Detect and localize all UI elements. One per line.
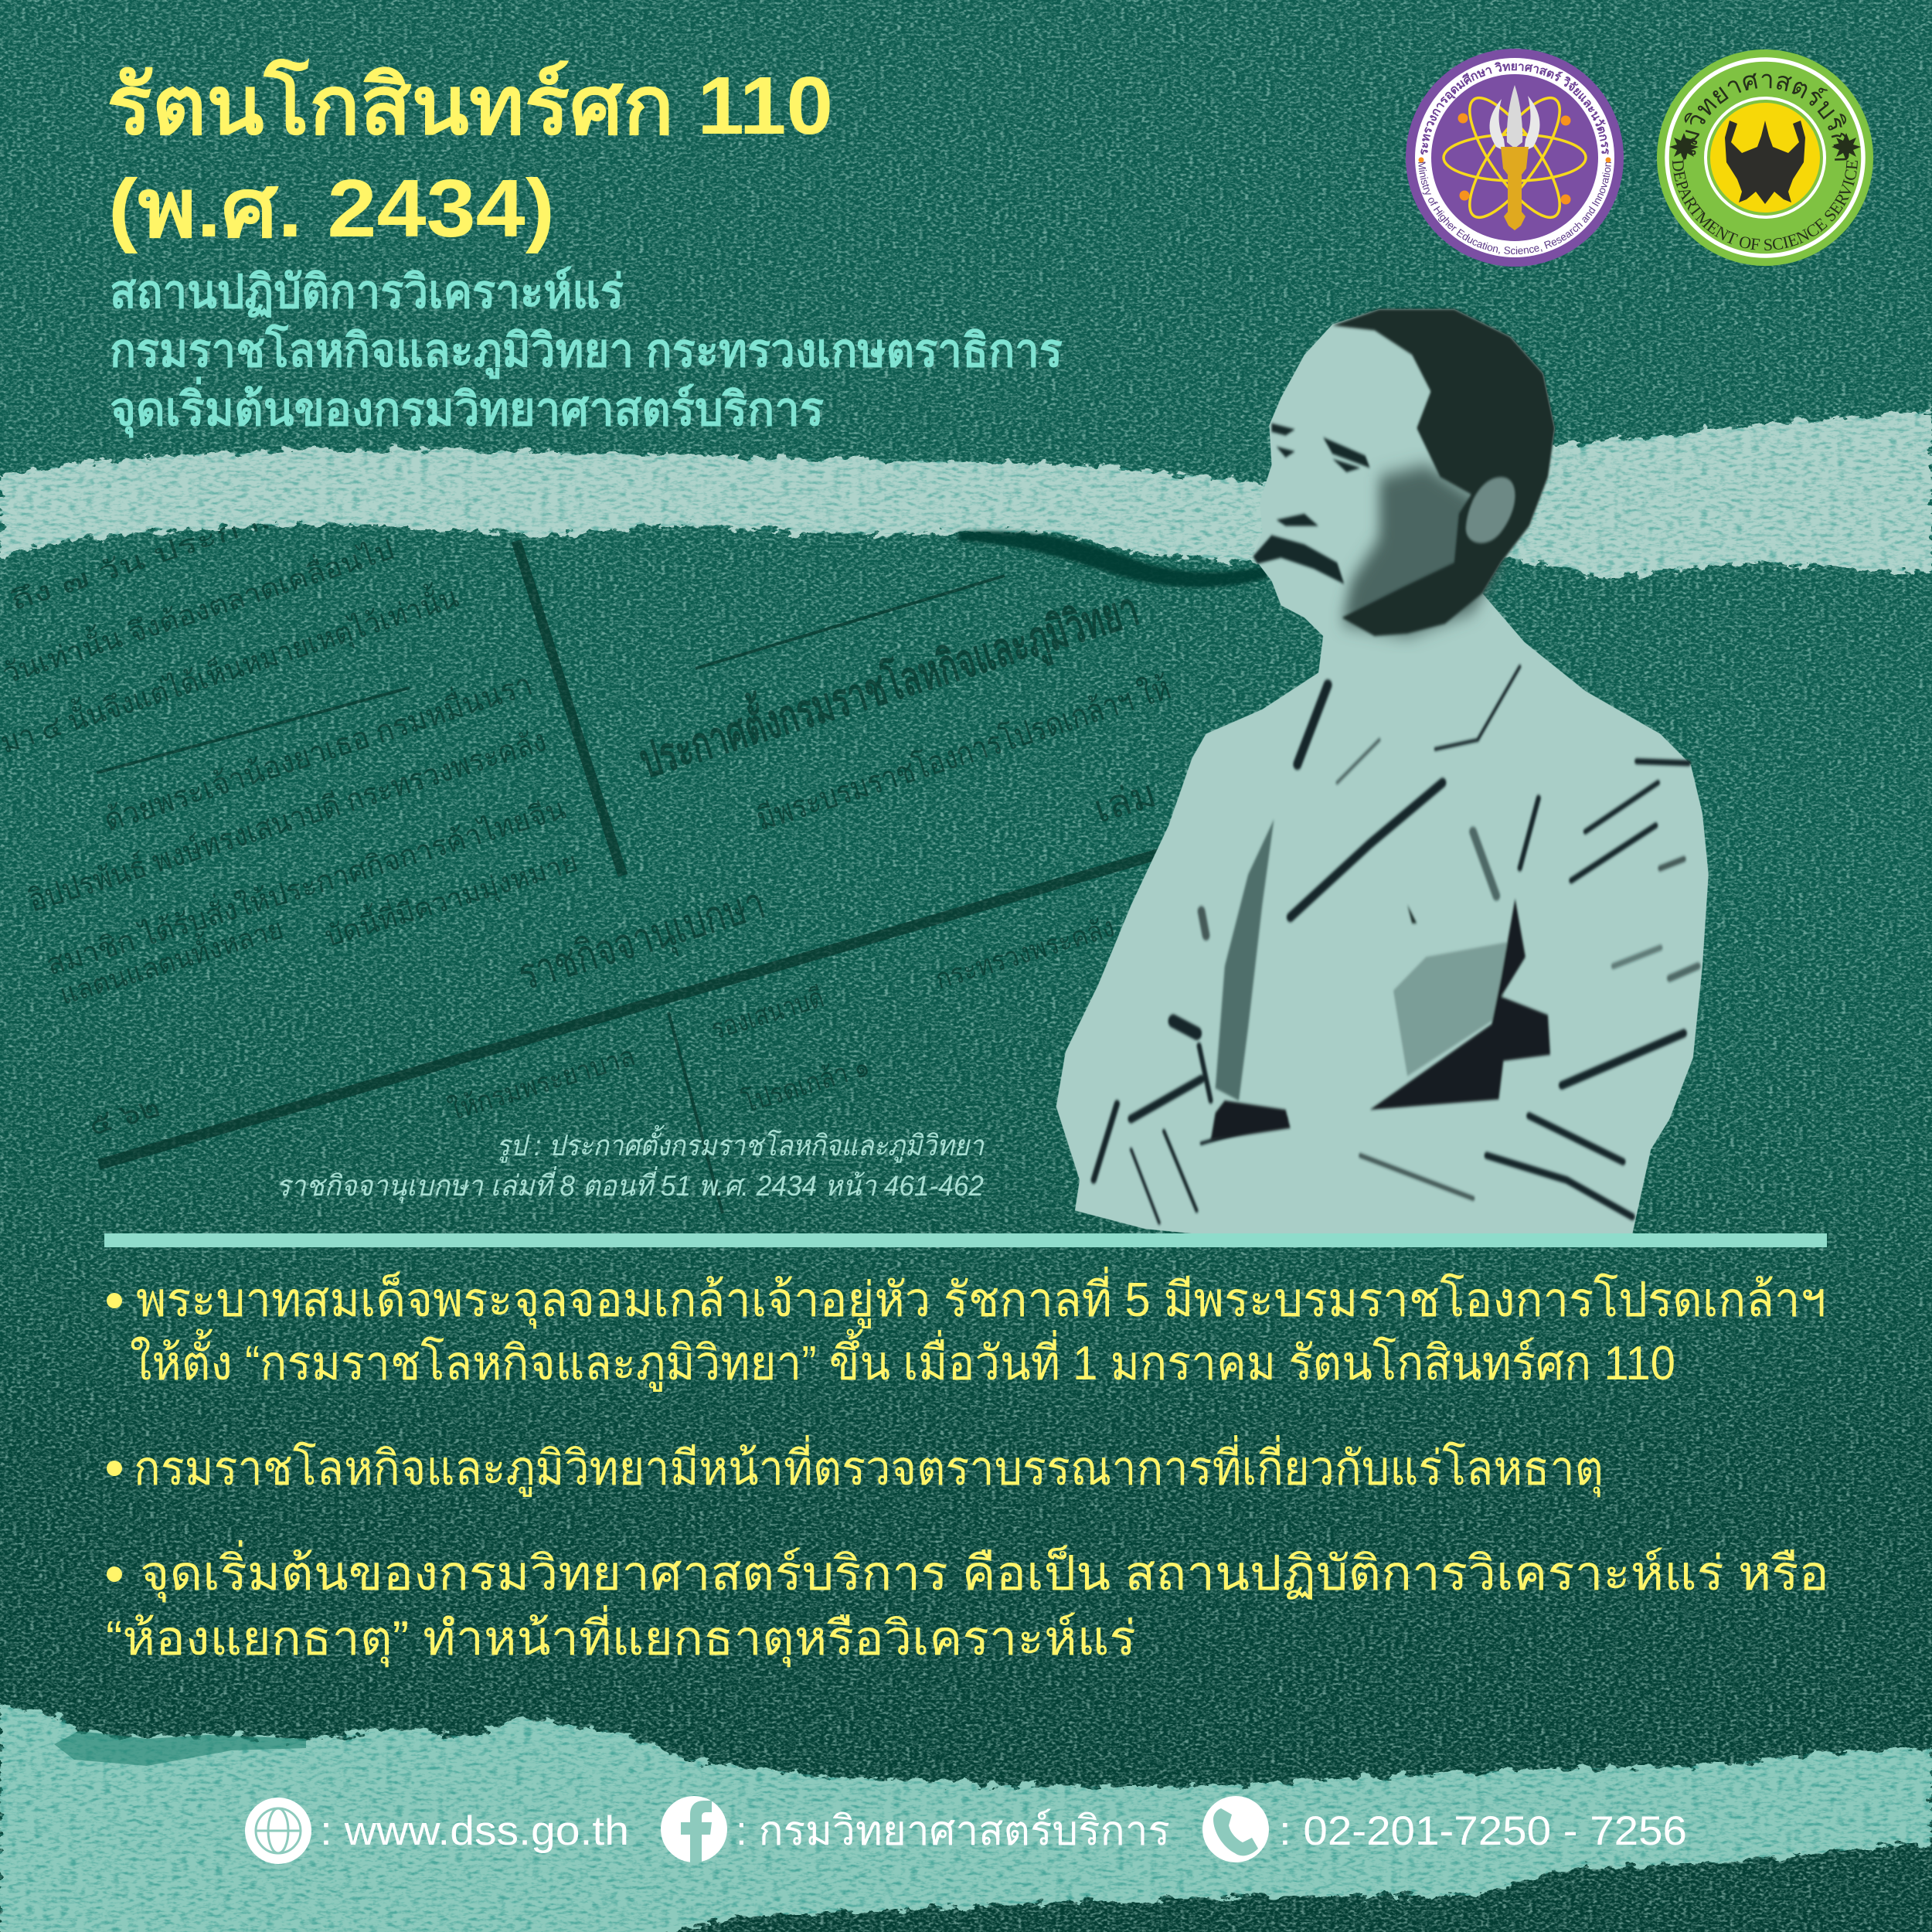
jacket shading and pocket <box>1211 819 1550 1141</box>
trident and gold staff <box>1490 85 1539 230</box>
torn paper strip: top <box>0 411 1932 597</box>
department name ring text <box>1668 65 1862 254</box>
scanned proclamation document printed faintly on background: วันเท่านั้น จึงต้องตลาดเคลื่อนไป <box>0 529 398 690</box>
scanned proclamation document printed faintly on background: บัดนี้ที่มีความมุ่งหมาย <box>320 841 582 954</box>
footer contact: phone <box>1202 1796 1687 1862</box>
department name ring text: กรมวิทยาศาสตร์บริการ <box>1682 73 1849 161</box>
body bullet 3: “ห้องแยกธาตุ” ทำหน้าที่แยกธาตุหรือวิเคราะห์แร่ <box>106 1605 1136 1667</box>
subtitle: จุดเริ่มต้นของกรมวิทยาศาสตร์บริการ <box>110 376 824 438</box>
scanned proclamation document printed faintly on background: อิปปรพันธ์ พงษ์ทรงเสนาบดี กระทรวงพระคลัง <box>24 723 550 919</box>
subtitle: สถานปฏิบัติการวิเคราะห์แร่ <box>110 266 624 318</box>
atom orbits <box>1444 86 1586 230</box>
logo: Department of Science Service <box>1657 49 1873 266</box>
title: รัตนโกสินทร์ศก 110 <box>107 58 833 151</box>
footer contact: facebook: : กรมวิทยาศาสตร์บริการ <box>736 1808 1170 1854</box>
image caption: รูป : ประกาศตั้งกรมราชโลหกิจและภูมิวิทยา <box>496 1124 985 1163</box>
body bullet 1: ให้ตั้ง “กรมราชโลหกิจและภูมิวิทยา” ขึ้น เมื่อวันที่ 1 มกราคม รัตนโกสินทร์ศก 110 <box>130 1328 1675 1392</box>
moustache, eyes and brows <box>1253 423 1370 584</box>
scanned proclamation document printed faintly on background: เล่ม <box>1089 771 1161 832</box>
logo: ministry emblem <box>1406 49 1624 267</box>
scanned proclamation document printed faintly on background: ๕ ๖๒ <box>85 1089 164 1143</box>
scanned proclamation document printed faintly on background: โปรดเกล้า ๑ <box>738 1050 873 1119</box>
icon: globe <box>245 1798 311 1864</box>
body bullet 3: จุดเริ่มต้นของกรมวิทยาศาสตร์บริการ คือเป็น สถานปฏิบัติการวิเคราะห์แร่ หรือ <box>140 1540 1829 1602</box>
scanned proclamation document printed faintly on background: ถึง ๗ วัน ประกาศนี้กำ <box>5 474 354 617</box>
title <box>107 58 833 254</box>
torn paper strip: bottom <box>0 1700 1932 1932</box>
portrait photograph cut-out <box>1056 309 1709 1235</box>
title: (พ.ศ. 2434) <box>108 163 555 254</box>
scanned proclamation document printed faintly on background: ราชกิจจานุเบกษา <box>512 878 771 1002</box>
icon: garuda <box>1725 121 1805 204</box>
icon: facebook <box>661 1796 727 1862</box>
body bullet 3 <box>106 1540 1829 1667</box>
icon: phone <box>1202 1796 1269 1862</box>
subtitle <box>110 266 1063 438</box>
scanned proclamation document printed faintly on background: มา ๔ นั้นจึงแต่ได้เห็นหมายเหตุไว้เท่านั้น <box>0 575 463 761</box>
scanned proclamation document printed faintly on background: สมาชิก ได้รับสั่งให้ประกาศกิจการค้าไทยจีน <box>42 788 570 982</box>
ear <box>1466 477 1515 543</box>
jacket folds <box>1094 667 1698 1223</box>
ministry name in Thai and English: Ministry of Higher Education, Science, Research and Innovation <box>1418 162 1611 255</box>
image caption <box>276 1124 985 1203</box>
footer contact: facebook <box>661 1796 1170 1862</box>
footer contact: website <box>245 1798 629 1864</box>
scanned proclamation document printed faintly on background: แลตนแลตนทั้งหลาย <box>55 908 287 1011</box>
face shadow <box>1342 464 1501 636</box>
hair <box>1332 309 1555 636</box>
scanned proclamation document printed faintly on background: ประกาศตั้งกรมราชโลหกิจและภูมิวิทยา <box>631 573 1145 791</box>
footer contact: website: : www.dss.go.th <box>320 1808 629 1854</box>
body bullet 2: กรมราชโลหกิจและภูมิวิทยามีหน้าที่ตรวจตราบรรณาการที่เกี่ยวกับแร่โลหธาตุ <box>134 1435 1604 1497</box>
scanned proclamation document printed faintly on background: รองเสนาบดี <box>707 981 828 1046</box>
scanned proclamation document printed faintly on background: ให้กรมพระยาบาล <box>444 1039 638 1127</box>
subtitle: กรมราชโลหกิจและภูมิวิทยา กระทรวงเกษตราธิการ <box>110 323 1063 379</box>
ministry name in Thai and English: กระทรวงการอุดมศึกษา วิทยาศาสตร์ วิจัยและนวัตกรรม <box>1420 62 1609 155</box>
ministry name in Thai and English <box>1416 60 1614 257</box>
body bullet 1: พระบาทสมเด็จพระจุลจอมเกล้าเจ้าอยู่หัว รัชกาลที่ 5 มีพระบรมราชโองการโปรดเกล้าฯ <box>136 1267 1826 1328</box>
scanned proclamation document printed faintly on background: ด้วยพระเจ้าน้องยาเธอ กรมหมื่นนรา <box>98 663 536 838</box>
scanned proclamation document printed faintly on background: มีพระบรมราชโองการโปรดเกล้าฯ ให้ <box>752 668 1175 838</box>
image caption: ราชกิจจานุเบกษา เล่มที่ 8 ตอนที่ 51 พ.ศ. 2434 หน้า 461-462 <box>276 1165 984 1203</box>
department name ring text: DEPARTMENT OF SCIENCE SERVICE <box>1668 158 1862 254</box>
scanned proclamation document printed faintly on background <box>0 474 1175 1213</box>
footer contact: phone: : 02-201-7250 - 7256 <box>1279 1808 1687 1854</box>
divider bar <box>104 1233 1827 1247</box>
silhouette <box>1056 309 1709 1235</box>
body bullet 1 <box>107 1267 1826 1392</box>
scanned proclamation document printed faintly on background: กระทรวงพระคลัง <box>931 910 1118 995</box>
